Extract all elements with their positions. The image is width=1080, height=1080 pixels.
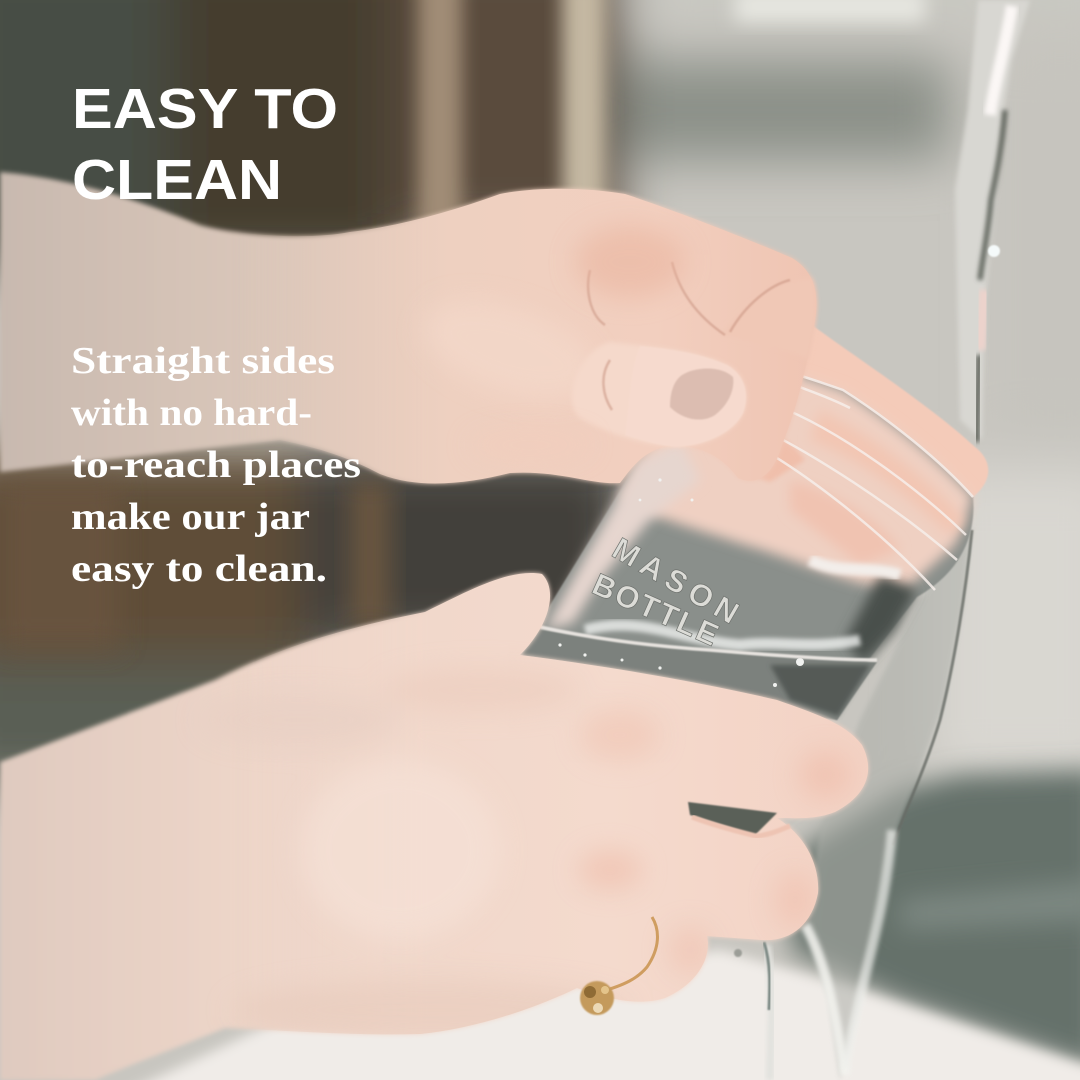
water line: [540, 627, 877, 660]
glass mason jar: [520, 353, 973, 720]
body text: Straight sides: [71, 340, 335, 382]
title: [72, 77, 338, 212]
body text: easy to clean.: [71, 548, 327, 590]
sink basin: [110, 770, 1080, 1080]
jar body: [520, 353, 973, 720]
index finger through knuckles: [720, 278, 816, 360]
jar screw threads: [710, 353, 973, 590]
body text: [71, 340, 361, 590]
dark shadow right: [845, 575, 917, 665]
embossed jar lettering: BOTTLE: [587, 566, 726, 654]
embossed jar lettering: MASON: [606, 531, 750, 634]
water droplets: [558, 478, 804, 687]
upper hand and arm: [0, 172, 816, 483]
thumbnail: [670, 368, 733, 420]
pink reflection in upper jar: [620, 353, 973, 590]
body text: with no hard-: [71, 392, 312, 434]
frosted left wall: [545, 440, 700, 630]
thumb of upper hand: [572, 342, 746, 447]
blurred wooden streaks: [0, 0, 925, 650]
water sheet running off jar: [805, 525, 972, 1080]
far fingers behind jar: [780, 322, 988, 530]
white highlights along waterline: [585, 625, 860, 645]
thumb highlight: [463, 326, 566, 374]
hand creases: [588, 262, 790, 410]
water stream falling from tap: [734, 0, 1030, 1080]
palm shading: [284, 684, 848, 1034]
knuckle shading: [576, 224, 683, 300]
jar base seen between fingers: [688, 802, 777, 835]
lower hand and arm: [0, 573, 868, 1080]
body text: to-reach places: [71, 444, 361, 486]
finger seen through glass: [725, 430, 805, 482]
title: EASY TO: [72, 77, 338, 141]
finger shadow: [692, 817, 790, 836]
gold ring with flower: [580, 917, 657, 1015]
water below waterline: [522, 630, 877, 720]
body text: make our jar: [71, 496, 310, 538]
title: CLEAN: [72, 148, 282, 212]
